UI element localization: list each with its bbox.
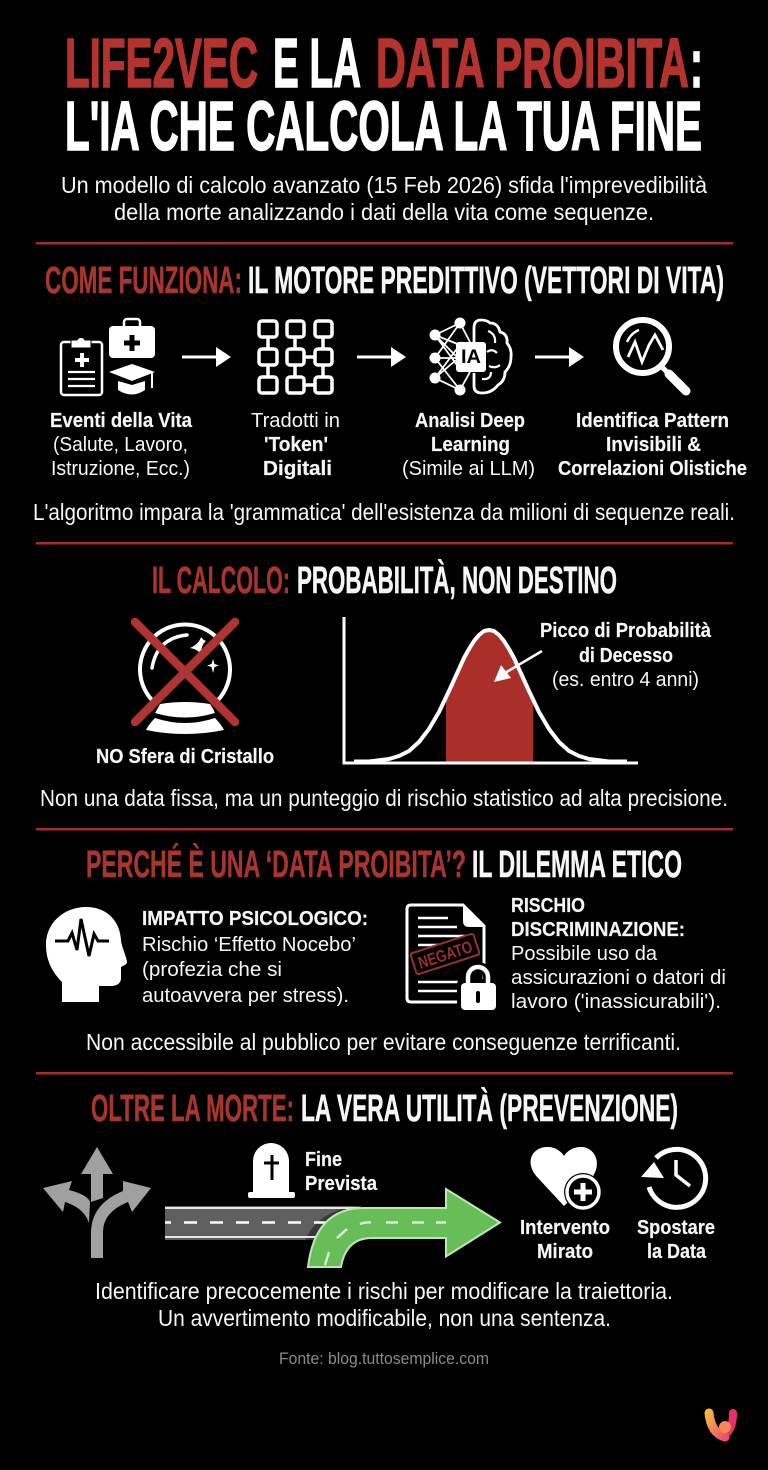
icon: magnifier	[616, 320, 686, 391]
text: tokens	[251, 409, 340, 480]
text: tokens: 'Token'	[264, 433, 328, 456]
text: psychological impact	[142, 907, 368, 1007]
panel: oltre la morte	[43, 1086, 715, 1331]
panel: come funziona	[33, 260, 747, 525]
text: deep learning: Analisi Deep	[415, 409, 525, 432]
label: fine prevista: Prevista	[305, 1172, 378, 1195]
subtitle	[61, 172, 707, 225]
subtitle: Un modello di calcolo avanzato (15 Feb 2026) sfida l'imprevedibilità	[61, 172, 707, 198]
heading: oltre la morte: OLTRE LA MORTE:	[91, 1088, 294, 1130]
arrow: green path	[308, 1189, 500, 1267]
subtitle: della morte analizzando i dati della vita come sequenze.	[114, 199, 654, 225]
title: E LA	[273, 24, 361, 102]
label: fine prevista	[305, 1148, 378, 1195]
label: fine prevista: Fine	[305, 1148, 342, 1171]
title: LIFE2VEC	[65, 24, 258, 102]
callout: probability peak: (es. entro 4 anni)	[552, 668, 699, 691]
icon: crossroads arrows	[43, 1147, 151, 1258]
text: deep learning	[402, 409, 535, 480]
text: life events: (Salute, Lavoro,	[53, 433, 188, 456]
text: discrimination risk: DISCRIMINAZIONE:	[511, 918, 685, 941]
panel: il calcolo	[40, 558, 728, 811]
icon: crossed crystal ball	[135, 622, 235, 734]
stamp: negato: NEGATO	[416, 937, 475, 973]
label: spostare la data: la Data	[647, 1240, 707, 1263]
label: intervento mirato: Intervento	[520, 1216, 610, 1239]
text: closing sentence: Un avvertimento modificabile, non una sentenza.	[158, 1305, 611, 1331]
heading: il calcolo: IL CALCOLO:	[152, 560, 290, 602]
heading: data proibita: PERCHÉ È UNA ‘DATA PROIBITA’?	[86, 842, 466, 886]
icon: tokens grid	[259, 321, 332, 393]
arrow: step 1	[182, 347, 231, 367]
text: patterns: Identifica Pattern	[576, 409, 729, 432]
text: closing sentence: Identificare precocemente i rischi per modificare la traiettoria.	[95, 1278, 673, 1304]
callout: probability peak: di Decesso	[579, 644, 673, 667]
icon: denied document	[407, 905, 500, 1014]
chart: probability curve	[344, 617, 638, 763]
text: discrimination risk: assicurazioni o datori di	[511, 966, 726, 989]
text: patterns	[558, 409, 747, 480]
label: intervento mirato	[520, 1216, 610, 1263]
text: discrimination risk	[511, 894, 726, 1013]
text: patterns: Correlazioni Olistiche	[558, 457, 747, 480]
source credit: Fonte: blog.tuttosemplice.com	[279, 1350, 489, 1368]
label: spostare la data: Spostare	[637, 1216, 715, 1239]
icon: life events	[61, 319, 155, 395]
title	[65, 24, 703, 165]
road: grey path	[165, 1206, 362, 1240]
heading: come funziona: COME FUNZIONA:	[45, 260, 242, 302]
icon: clock with arrow	[641, 1149, 706, 1207]
text: psychological impact: Rischio ‘Effetto Nocebo’	[142, 933, 356, 956]
logo	[709, 1413, 733, 1437]
text: discrimination risk: Possibile uso da	[511, 942, 658, 965]
title: :	[690, 24, 703, 102]
callout: probability peak: Picco di Probabilità	[540, 619, 712, 642]
text: tokens: Tradotti in	[251, 409, 340, 432]
text: life events: Eventi della Vita	[50, 409, 193, 432]
text: tokens: Digitali	[263, 457, 332, 480]
callout: probability peak	[494, 619, 712, 691]
text: discrimination risk: RISCHIO	[511, 894, 585, 917]
heading: il calcolo	[152, 558, 617, 602]
text: deep learning: (Simile ai LLM)	[402, 457, 535, 480]
label: intervento mirato: Mirato	[537, 1240, 593, 1263]
icon: tombstone	[248, 1143, 295, 1198]
label: spostare la data	[637, 1216, 715, 1263]
icon: AI brain	[430, 318, 511, 396]
text: closing sentence	[95, 1278, 673, 1331]
icon: head with pulse	[46, 907, 127, 1002]
arrow: step 3	[535, 347, 584, 367]
heading: come funziona	[45, 260, 724, 302]
text: discrimination risk: lavoro ('inassicurabili').	[511, 990, 721, 1013]
icon: AI brain: IA	[461, 347, 481, 368]
icon: heart with plus	[531, 1147, 602, 1211]
heading: oltre la morte	[91, 1086, 678, 1130]
text: access sentence: Non accessibile al pubblico per evitare conseguenze terrificanti.	[86, 1029, 681, 1055]
text: psychological impact: autoavvera per stress).	[142, 984, 349, 1007]
text: life events	[50, 409, 193, 480]
arrow: step 2	[357, 347, 406, 367]
text: deep learning: Learning	[431, 433, 510, 456]
label: crystal ball: NO Sfera di Cristallo	[96, 745, 274, 768]
text: patterns: Invisibili &	[606, 433, 701, 456]
text: life events: Istruzione, Ecc.)	[51, 457, 190, 480]
panel: data proibita	[46, 842, 726, 1055]
text: psychological impact: (profezia che si	[142, 958, 282, 981]
text: psychological impact: IMPATTO PSICOLOGICO:	[142, 907, 368, 930]
